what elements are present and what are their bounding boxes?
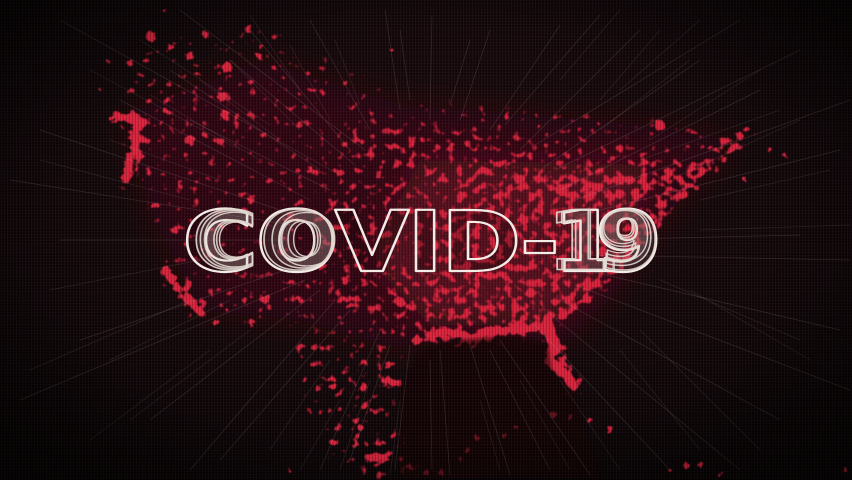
title: motion echoes on C, O, 1, 9: 9 <box>600 198 652 276</box>
map: blotchy red population density <box>112 25 745 478</box>
map: dark Gulf of Mexico <box>398 336 600 478</box>
title text: COVID-19 <box>182 194 662 291</box>
map: coastline bands <box>120 117 574 458</box>
title: COVID-19 outlined lettering <box>182 194 662 291</box>
title: motion echoes on C, O, 1, 9: 1 <box>546 194 610 289</box>
title: motion echoes on C, O, 1, 9: 1 <box>552 194 610 289</box>
title: motion echoes on C, O, 1, 9 <box>192 194 661 289</box>
map: faint dark-red landmass tone <box>125 60 740 350</box>
title: motion echoes on C, O, 1, 9: O <box>259 195 337 289</box>
title: motion echoes on C, O, 1, 9: C <box>196 196 258 285</box>
map: large clusters <box>150 36 660 457</box>
title: motion echoes on C, O, 1, 9: 9 <box>597 195 661 288</box>
title: motion echoes on C, O, 1, 9: C <box>192 195 258 289</box>
title: motion echoes on C, O, 1, 9: O <box>276 201 338 283</box>
title: motion echoes on C, O, 1, 9: O <box>268 197 338 285</box>
title: motion echoes on C, O, 1, 9: C <box>201 199 257 283</box>
map: medium clusters <box>112 28 686 473</box>
title: motion echoes on C, O, 1, 9: 9 <box>598 196 656 282</box>
